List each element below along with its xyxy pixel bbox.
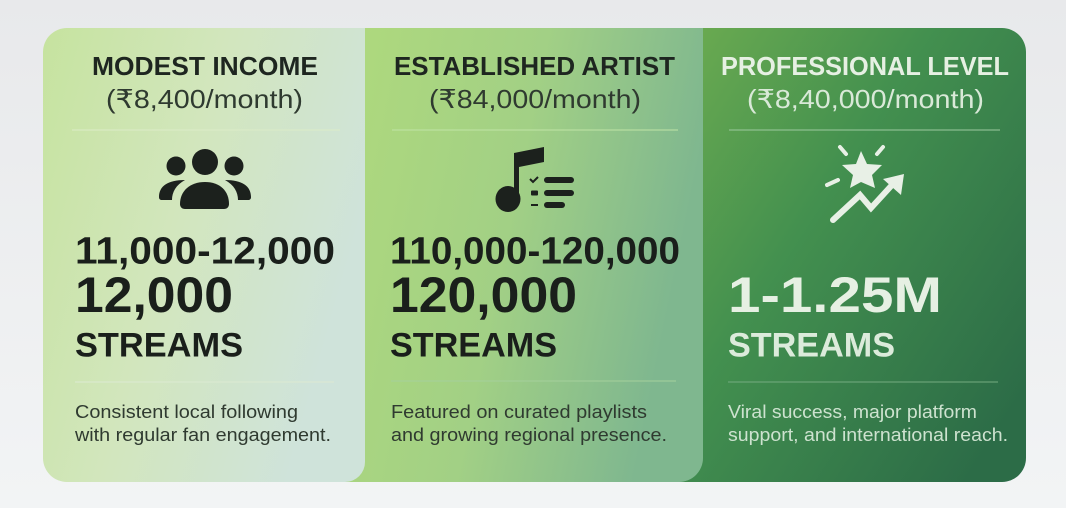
heading: professional level: PROFESSIONAL LEVEL [721,51,1009,81]
heading: established artist: ESTABLISHED ARTIST [394,51,675,81]
subheading: established income: (₹84,000/month) [429,84,641,114]
panel: modest income [43,28,365,482]
stream range: established: 110,000-120,000 [390,230,680,272]
streams label: professional: STREAMS [728,326,895,364]
stream count: modest: 12,000 [75,267,233,323]
streams label: established: STREAMS [390,326,557,364]
stream count: established: 120,000 [390,267,577,323]
description: modest: Consistent local following [75,401,298,422]
streams label: modest: STREAMS [75,326,243,364]
icon: music note with list [496,147,574,212]
icon: star and rising arrow [827,147,904,220]
panel: professional level [660,28,1026,482]
stream range: modest: 11,000-12,000 [75,230,335,272]
description: established: Featured on curated playlists [391,401,647,422]
subheading: modest income amount: (₹8,400/month) [106,84,303,114]
description: established: and growing regional presence. [391,424,667,445]
description: professional: Viral success, major platform [728,401,977,422]
heading: modest income: MODEST INCOME [92,51,318,81]
icon: group of people [159,149,251,209]
description: modest: with regular fan engagement. [74,424,331,445]
description: professional: support, and international reach. [728,424,1008,445]
subheading: professional income: (₹8,40,000/month) [747,84,984,114]
panel: established artist [330,28,703,482]
stream count: professional: 1-1.25M [728,267,942,323]
